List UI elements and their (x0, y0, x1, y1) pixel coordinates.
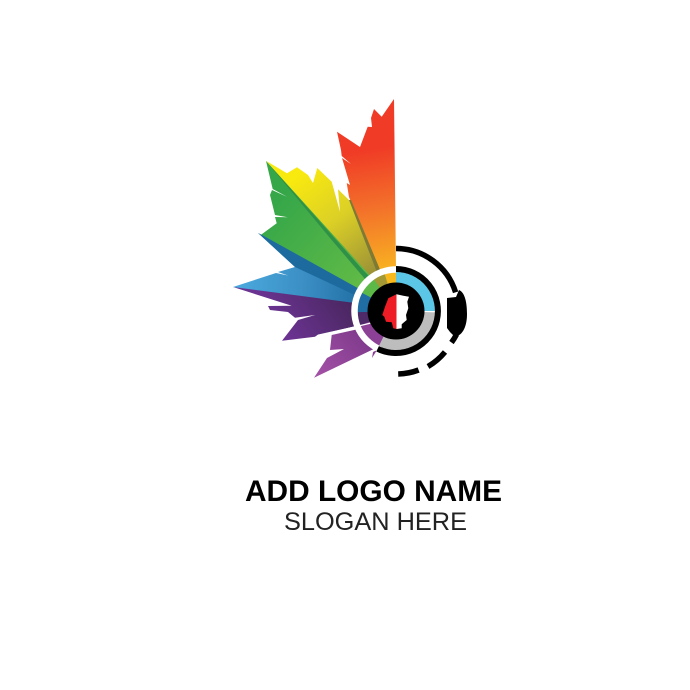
eye and headphones group (368, 248, 467, 374)
wedge: purple (356, 311, 396, 326)
arc: light blue iris segment (396, 278, 430, 311)
feather: magenta sliver (372, 350, 377, 358)
feather: dark purple (233, 287, 396, 341)
icon: white half of face silhouette (396, 294, 409, 329)
black pupil disc (368, 282, 424, 340)
wedge: olive (373, 273, 396, 311)
arc: dash near ear cup (452, 334, 456, 342)
feather: red orange (337, 99, 396, 283)
wedge: blue (356, 292, 396, 312)
arc: black inner ring (378, 269, 438, 353)
feather: dark blue edge (258, 233, 396, 311)
wedge: amber (384, 271, 396, 311)
white slit between purple and magenta feathers (321, 323, 371, 335)
feather: olive edge (349, 200, 385, 290)
wedge: green (361, 278, 396, 311)
logo name heading: ADD LOGO NAME (245, 475, 502, 508)
feather: dark green edge (266, 161, 385, 293)
arc: headband (396, 248, 456, 292)
feather: blue (233, 233, 396, 313)
ring wedges: colour segments behind the white ring (356, 271, 396, 347)
feather: green (261, 161, 385, 300)
icon: rainbow feather wing emblem (233, 99, 396, 378)
slogan text: SLOGAN HERE (284, 508, 467, 536)
feather: yellow (266, 161, 384, 290)
icon: headphone ear cup (447, 290, 467, 337)
icon: red half of face profile (382, 294, 396, 329)
wedge: magenta (359, 311, 396, 347)
arc: bottom dash (398, 370, 419, 374)
feather: magenta (314, 311, 396, 378)
arc: middle dash (428, 352, 445, 366)
arc: grey iris segment (381, 312, 430, 345)
white ring around the eye (354, 270, 438, 352)
